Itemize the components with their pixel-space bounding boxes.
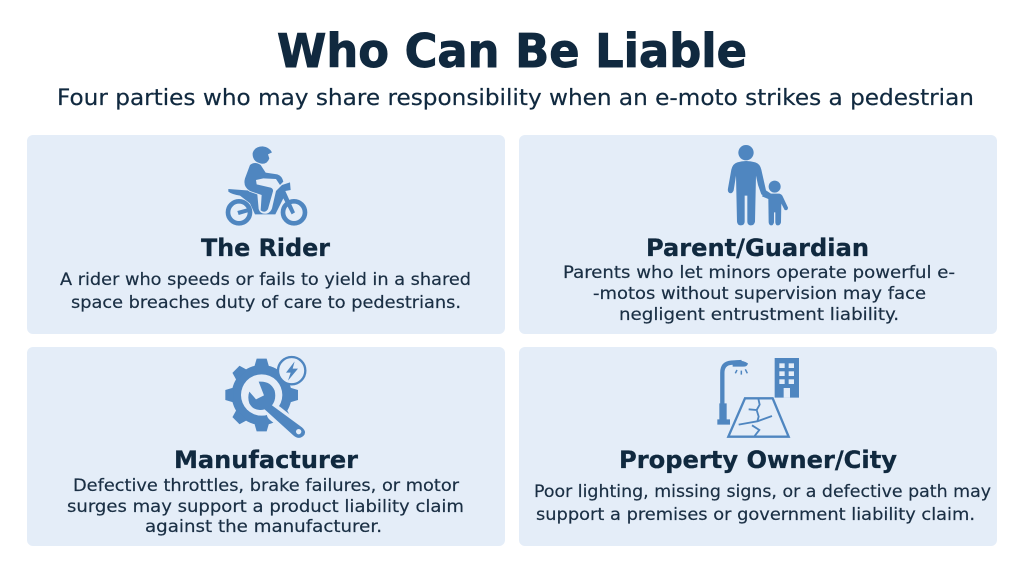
title: Who Can Be Liable (277, 24, 747, 78)
icon: parent and child (728, 145, 788, 225)
body text (60, 270, 471, 313)
body text: against the manufacturer. (145, 517, 382, 537)
heading: The Rider (201, 234, 330, 262)
heading: Manufacturer (174, 446, 358, 474)
panel: parent/guardian (519, 135, 997, 334)
body text: support a premises or government liability claim. (536, 505, 975, 525)
heading: Property Owner/City (619, 446, 897, 474)
heading: Parent/Guardian (646, 234, 869, 262)
body text: Poor lighting, missing signs, or a defective path may (534, 482, 991, 502)
subtitle: Four parties who may share responsibility when an e-moto strikes a pedestrian (57, 86, 974, 111)
body text: Parents who let minors operate powerful e- (563, 263, 955, 283)
icon: motorcycle rider (228, 146, 305, 223)
panel: property owner/city (519, 347, 997, 546)
body text: A rider who speeds or fails to yield in a shared (60, 270, 471, 290)
body text (534, 482, 991, 525)
body text (67, 476, 464, 537)
body text: negligent entrustment liability. (619, 305, 899, 325)
panel: the rider (27, 135, 505, 334)
body text: -motos without supervision may face (593, 284, 926, 304)
body text: Defective throttles, brake failures, or motor (73, 476, 459, 496)
icon: gear and wrench (225, 357, 305, 438)
body text (563, 263, 955, 325)
panel: manufacturer (27, 347, 505, 546)
body text: space breaches duty of care to pedestrians. (71, 293, 461, 313)
body text: surges may support a product liability claim (67, 497, 464, 517)
icon: street lamp, building and cracked path (717, 358, 799, 437)
